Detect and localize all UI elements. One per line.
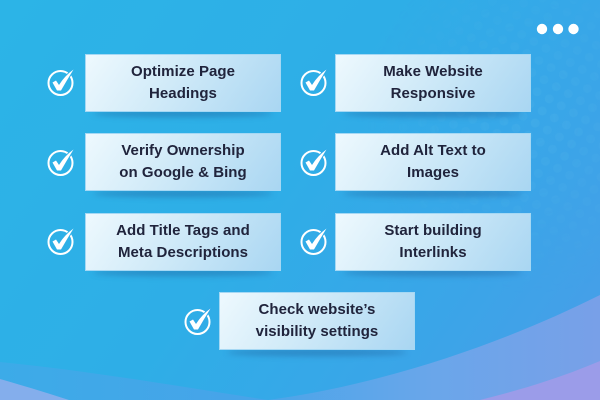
icon: check 5 — [48, 228, 74, 255]
box: Add Alt Text: Add Alt Text to — [380, 142, 486, 159]
box: Make Website Responsive — [335, 54, 531, 112]
shadow: Alt Text box — [343, 190, 523, 197]
box: Check visibility settings — [219, 292, 415, 350]
icon: check 1 — [48, 70, 74, 96]
shadow: Title Tags box — [93, 269, 273, 276]
box: Make Website Responsive: Make Website — [383, 63, 483, 80]
icon: check 3 — [48, 150, 74, 176]
box: Optimize Page Headings — [85, 54, 281, 112]
icon: check 6 — [300, 228, 326, 255]
box: Optimize Page Headings: Headings — [149, 85, 217, 102]
shadow: Verify box — [93, 190, 273, 197]
box: Add Title Tags: Add Title Tags and — [116, 222, 250, 239]
box: Make Website Responsive: Responsive — [391, 85, 475, 102]
shadow: visibility box — [227, 349, 407, 356]
shadow: Optimize box — [93, 110, 273, 117]
box: Add Alt Text: Images — [407, 164, 459, 181]
box: Start building Interlinks — [335, 213, 531, 271]
box: Add Title Tags: Meta Descriptions — [118, 244, 248, 261]
box: Check visibility settings: visibility settings — [256, 323, 378, 340]
shadow: Interlinks box — [343, 269, 523, 276]
box: Add Title Tags — [85, 213, 281, 271]
background waves — [0, 295, 600, 400]
box: Check visibility settings: Check website’s — [259, 301, 375, 318]
box: Optimize Page Headings: Optimize Page — [131, 63, 235, 80]
icon: three dots menu — [536, 24, 579, 34]
box: Start building Interlinks: Interlinks — [399, 244, 467, 261]
box: Verify Ownership: on Google & Bing — [119, 164, 247, 181]
box: Start building Interlinks: Start building — [384, 222, 482, 239]
box: Verify Ownership: Verify Ownership — [121, 142, 245, 159]
icon: check 7 — [184, 308, 210, 335]
shadow: Make Website box — [343, 110, 523, 117]
icon: check 4 — [300, 150, 326, 176]
icon: check 2 — [300, 70, 326, 96]
box: Add Alt Text — [335, 133, 531, 191]
box: Verify Ownership — [85, 133, 281, 191]
